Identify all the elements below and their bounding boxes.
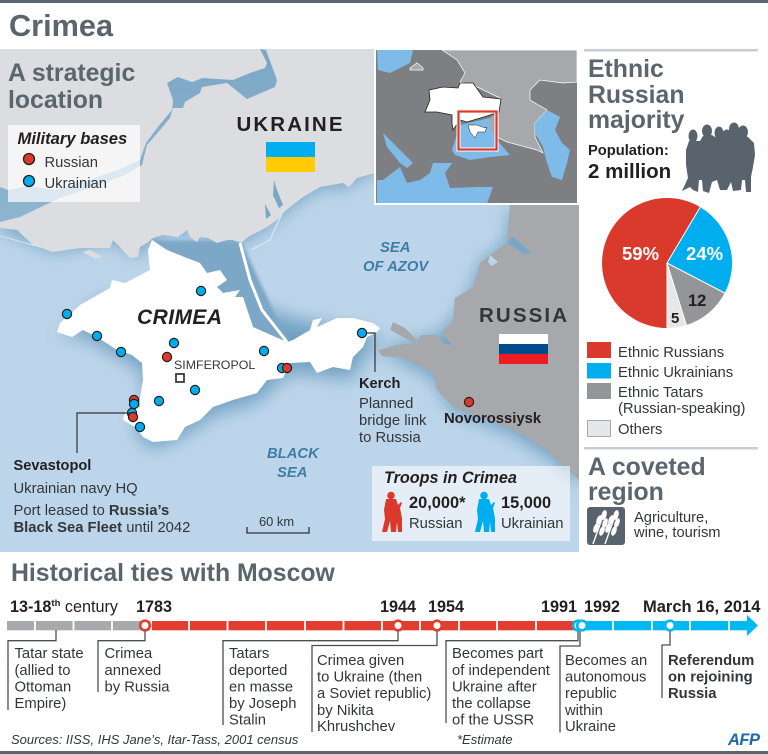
scale bar: 60 km xyxy=(259,514,294,529)
event: annexed: Crimea xyxy=(104,646,153,662)
pie legend: Ethnic Tatars xyxy=(618,385,703,401)
map heading: location xyxy=(8,87,103,114)
military bases legend: Russian xyxy=(44,155,98,171)
event: independent Ukraine: of the USSR xyxy=(452,712,534,728)
pie chart: 59% xyxy=(622,243,659,264)
military bases legend: Ukrainian xyxy=(44,176,107,192)
label: Russia with flag: RUSSIA xyxy=(479,304,567,327)
icon: group of people xyxy=(682,122,755,193)
event: deportation xyxy=(229,646,296,728)
base markers xyxy=(62,286,474,432)
event: given to Ukraine: to Ukraine (then xyxy=(317,670,422,686)
icon: Ukrainian soldier xyxy=(475,492,495,532)
heading xyxy=(588,56,685,134)
year labels: th xyxy=(51,598,61,609)
callout: Sevastopol: Black Sea Fleet until 2042 xyxy=(14,520,190,536)
label: Crimea: CRIMEA xyxy=(137,306,222,329)
label: Sea of Azov xyxy=(363,240,429,275)
title: Crimea xyxy=(9,8,114,43)
event: referendum: Referendum xyxy=(668,653,754,669)
event: independent Ukraine: of independent xyxy=(452,663,550,679)
panel: strategic location map xyxy=(0,49,600,552)
text: agriculture, wine, tourism xyxy=(633,510,721,541)
event: Tatar state xyxy=(14,646,84,712)
map heading: A strategic xyxy=(8,60,135,87)
callout: Sevastopol: Sevastopol xyxy=(14,458,91,474)
callout: Kerch: bridge link xyxy=(359,413,427,429)
population figure xyxy=(588,143,671,183)
military bases legend: Military bases xyxy=(18,129,127,148)
event: independent Ukraine: Ukraine after xyxy=(452,680,537,696)
population figure: Population: xyxy=(588,143,669,159)
year labels: 1954 xyxy=(428,598,464,616)
text: agriculture, wine, tourism: wine, tourism xyxy=(633,525,721,541)
event: autonomous republic xyxy=(564,653,647,735)
Dnieper river xyxy=(0,49,277,222)
event: deportation: by Joseph xyxy=(229,696,296,712)
label: Black Sea xyxy=(267,446,320,481)
population figure: 2 million xyxy=(588,160,671,183)
year labels: 1991 xyxy=(541,598,577,616)
pie legend xyxy=(587,342,746,438)
panel: troops in Crimea: Russian xyxy=(409,516,462,532)
callout: Sevastopol xyxy=(14,413,190,536)
year labels xyxy=(10,598,761,616)
event: given to Ukraine: Crimea given xyxy=(317,653,404,669)
event: referendum: Russia xyxy=(668,686,717,702)
icon: wheat xyxy=(587,507,625,545)
callout: Kerch xyxy=(359,333,427,446)
event: autonomous republic: republic xyxy=(565,686,617,702)
panel: troops in Crimea: 15,000 xyxy=(501,494,551,512)
event: given to Ukraine xyxy=(317,653,431,735)
callout: Kerch: to Russia xyxy=(359,430,421,446)
label: Simferopol: SIMFEROPOL xyxy=(174,358,255,372)
event markers xyxy=(140,621,675,630)
callout: Sevastopol: Port leased to Russia’s xyxy=(14,503,169,519)
heading: A coveted xyxy=(588,454,706,481)
event: independent Ukraine: the collapse xyxy=(452,696,531,712)
label: Russia with flag xyxy=(479,304,567,364)
timeline xyxy=(7,598,761,735)
panel: a coveted region xyxy=(584,447,758,545)
scale bar xyxy=(247,514,309,533)
panel: troops in Crimea: Ukrainian xyxy=(501,516,564,532)
event: annexed: by Russia xyxy=(104,680,170,696)
label: Simferopol xyxy=(174,358,255,382)
event: Tatar state: (allied to xyxy=(14,663,70,679)
heading: Russian xyxy=(588,82,684,109)
event: autonomous republic: Ukraine xyxy=(565,719,616,735)
label: Black Sea: BLACK xyxy=(267,446,320,462)
heading xyxy=(588,454,706,506)
heading: majority xyxy=(588,107,685,134)
callout: Kerch: Kerch xyxy=(359,376,400,392)
event: annexed: annexed xyxy=(104,663,161,679)
event: autonomous republic: Becomes an xyxy=(565,653,647,669)
sources: Sources: IISS, IHS Jane’s, Itar-Tass, 2001 census xyxy=(11,732,299,747)
Crimea landmass xyxy=(57,240,380,442)
Russia landmass xyxy=(378,204,579,480)
event: independent Ukraine xyxy=(452,646,550,728)
label: Black Sea: SEA xyxy=(277,465,307,481)
pie legend: Ethnic Russians xyxy=(618,345,724,361)
callout: Sevastopol: Ukrainian navy HQ xyxy=(14,481,138,497)
pie legend: (Russian-speaking) xyxy=(618,401,746,417)
year labels: century xyxy=(60,598,119,616)
pie chart xyxy=(602,198,732,328)
heading: region xyxy=(588,479,664,506)
panel: troops in Crimea: Troops in Crimea xyxy=(384,469,517,487)
label: Novorossiysk: Novorossiysk xyxy=(444,411,542,427)
event: Tatar state: Empire) xyxy=(14,696,66,712)
text: agriculture, wine, tourism: Agriculture, xyxy=(634,510,708,526)
timeline bar xyxy=(7,615,758,636)
event: deportation: en masse xyxy=(229,680,293,696)
year labels: March 16, 2014 xyxy=(643,598,761,616)
event: autonomous republic: within xyxy=(564,703,603,719)
inset locator map xyxy=(374,49,579,205)
event: Tatar state: Ottoman xyxy=(14,680,71,696)
event: referendum: on rejoining xyxy=(668,670,753,686)
pie legend: Others xyxy=(618,422,662,438)
military bases legend xyxy=(8,125,140,202)
label: Ukraine with flag: UKRAINE xyxy=(236,113,342,136)
pie chart: 24% xyxy=(686,243,723,264)
event: independent Ukraine: Becomes part xyxy=(452,646,543,662)
callout: Kerch: Planned xyxy=(359,396,413,412)
leader lines xyxy=(8,630,670,732)
event: Tatar state: Tatar state xyxy=(14,646,84,662)
Ukraine landmass xyxy=(0,49,375,258)
label: Sea of Azov: OF AZOV xyxy=(363,259,429,275)
label: Sea of Azov: SEA xyxy=(380,240,410,256)
heading: historical ties: Historical ties with Moscow xyxy=(11,560,336,587)
pie chart: 5 xyxy=(671,310,679,327)
event: given to Ukraine: Khrushchev xyxy=(317,719,396,735)
event: annexed xyxy=(104,646,170,696)
year labels: 1992 xyxy=(584,598,620,616)
year labels: 1944 xyxy=(380,598,416,616)
event: deportation: Tatars xyxy=(229,646,269,662)
pie legend: Ethnic Ukrainians xyxy=(618,365,733,381)
label: Ukraine with flag xyxy=(236,113,342,172)
event: given to Ukraine: by Nikita xyxy=(317,703,375,719)
year labels: 1783 xyxy=(136,598,172,616)
event: deportation: deported xyxy=(229,663,287,679)
panel: troops in Crimea: 20,000* xyxy=(409,494,466,512)
map heading xyxy=(8,60,135,114)
event: referendum xyxy=(668,653,754,702)
icon: Russian soldier xyxy=(382,492,402,532)
panel: troops in Crimea xyxy=(372,466,570,541)
panel: ethnic Russian majority xyxy=(584,49,758,438)
event: deportation: Stalin xyxy=(229,712,266,728)
year labels: 13-18 xyxy=(10,598,51,616)
event: autonomous republic: autonomous xyxy=(565,670,646,686)
AFP logo: AFP xyxy=(727,731,761,749)
footnote: *Estimate xyxy=(457,732,513,747)
heading: Ethnic xyxy=(588,56,664,83)
event: given to Ukraine: a Soviet republic) xyxy=(317,686,431,702)
pie chart: 12 xyxy=(688,292,706,310)
